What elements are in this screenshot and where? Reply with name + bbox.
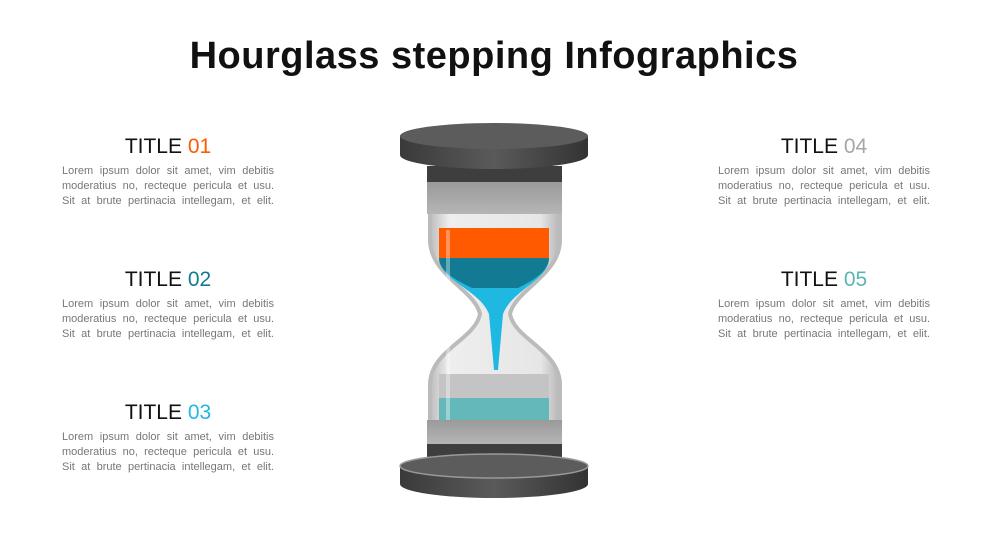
text block: title 01: TITLE 01 [125,135,211,158]
text block: title 03: Lorem ipsum dolor sit amet, vim debitis moderatius no, recteque pericula et usu. Sit at brute pertinacia intellegam, et elit. [62,431,274,473]
top sand [439,228,549,370]
text block: title 05: TITLE 05 [781,268,867,291]
text block: title 05 [718,268,930,340]
top cap [400,136,588,169]
title: Hourglass stepping Infographics [190,35,798,77]
text block: title 03 [62,401,274,473]
text block: title 01 [62,135,274,207]
base cap [400,466,588,498]
top collar [427,166,562,182]
text block: title 01: Lorem ipsum dolor sit amet, vim debitis moderatius no, recteque pericula et usu. Sit at brute pertinacia intellegam, et elit. [62,165,274,207]
text block: title 03: TITLE 03 [125,401,211,424]
bottom collar [427,420,562,444]
text block: title 04: Lorem ipsum dolor sit amet, vim debitis moderatius no, recteque pericula et usu. Sit at brute pertinacia intellegam, et elit. [718,165,930,207]
text block: title 02: TITLE 02 [125,268,211,291]
text block: title 04: TITLE 04 [781,135,867,158]
text block: title 02 [62,268,274,340]
bottom sand [439,374,549,398]
text block: title 04 [718,135,930,207]
text block: title 02: Lorem ipsum dolor sit amet, vim debitis moderatius no, recteque pericula et usu. Sit at brute pertinacia intellegam, et elit. [62,298,274,340]
glass [430,212,560,422]
text block: title 05: Lorem ipsum dolor sit amet, vim debitis moderatius no, recteque pericula et usu. Sit at brute pertinacia intellegam, et elit. [718,298,930,340]
